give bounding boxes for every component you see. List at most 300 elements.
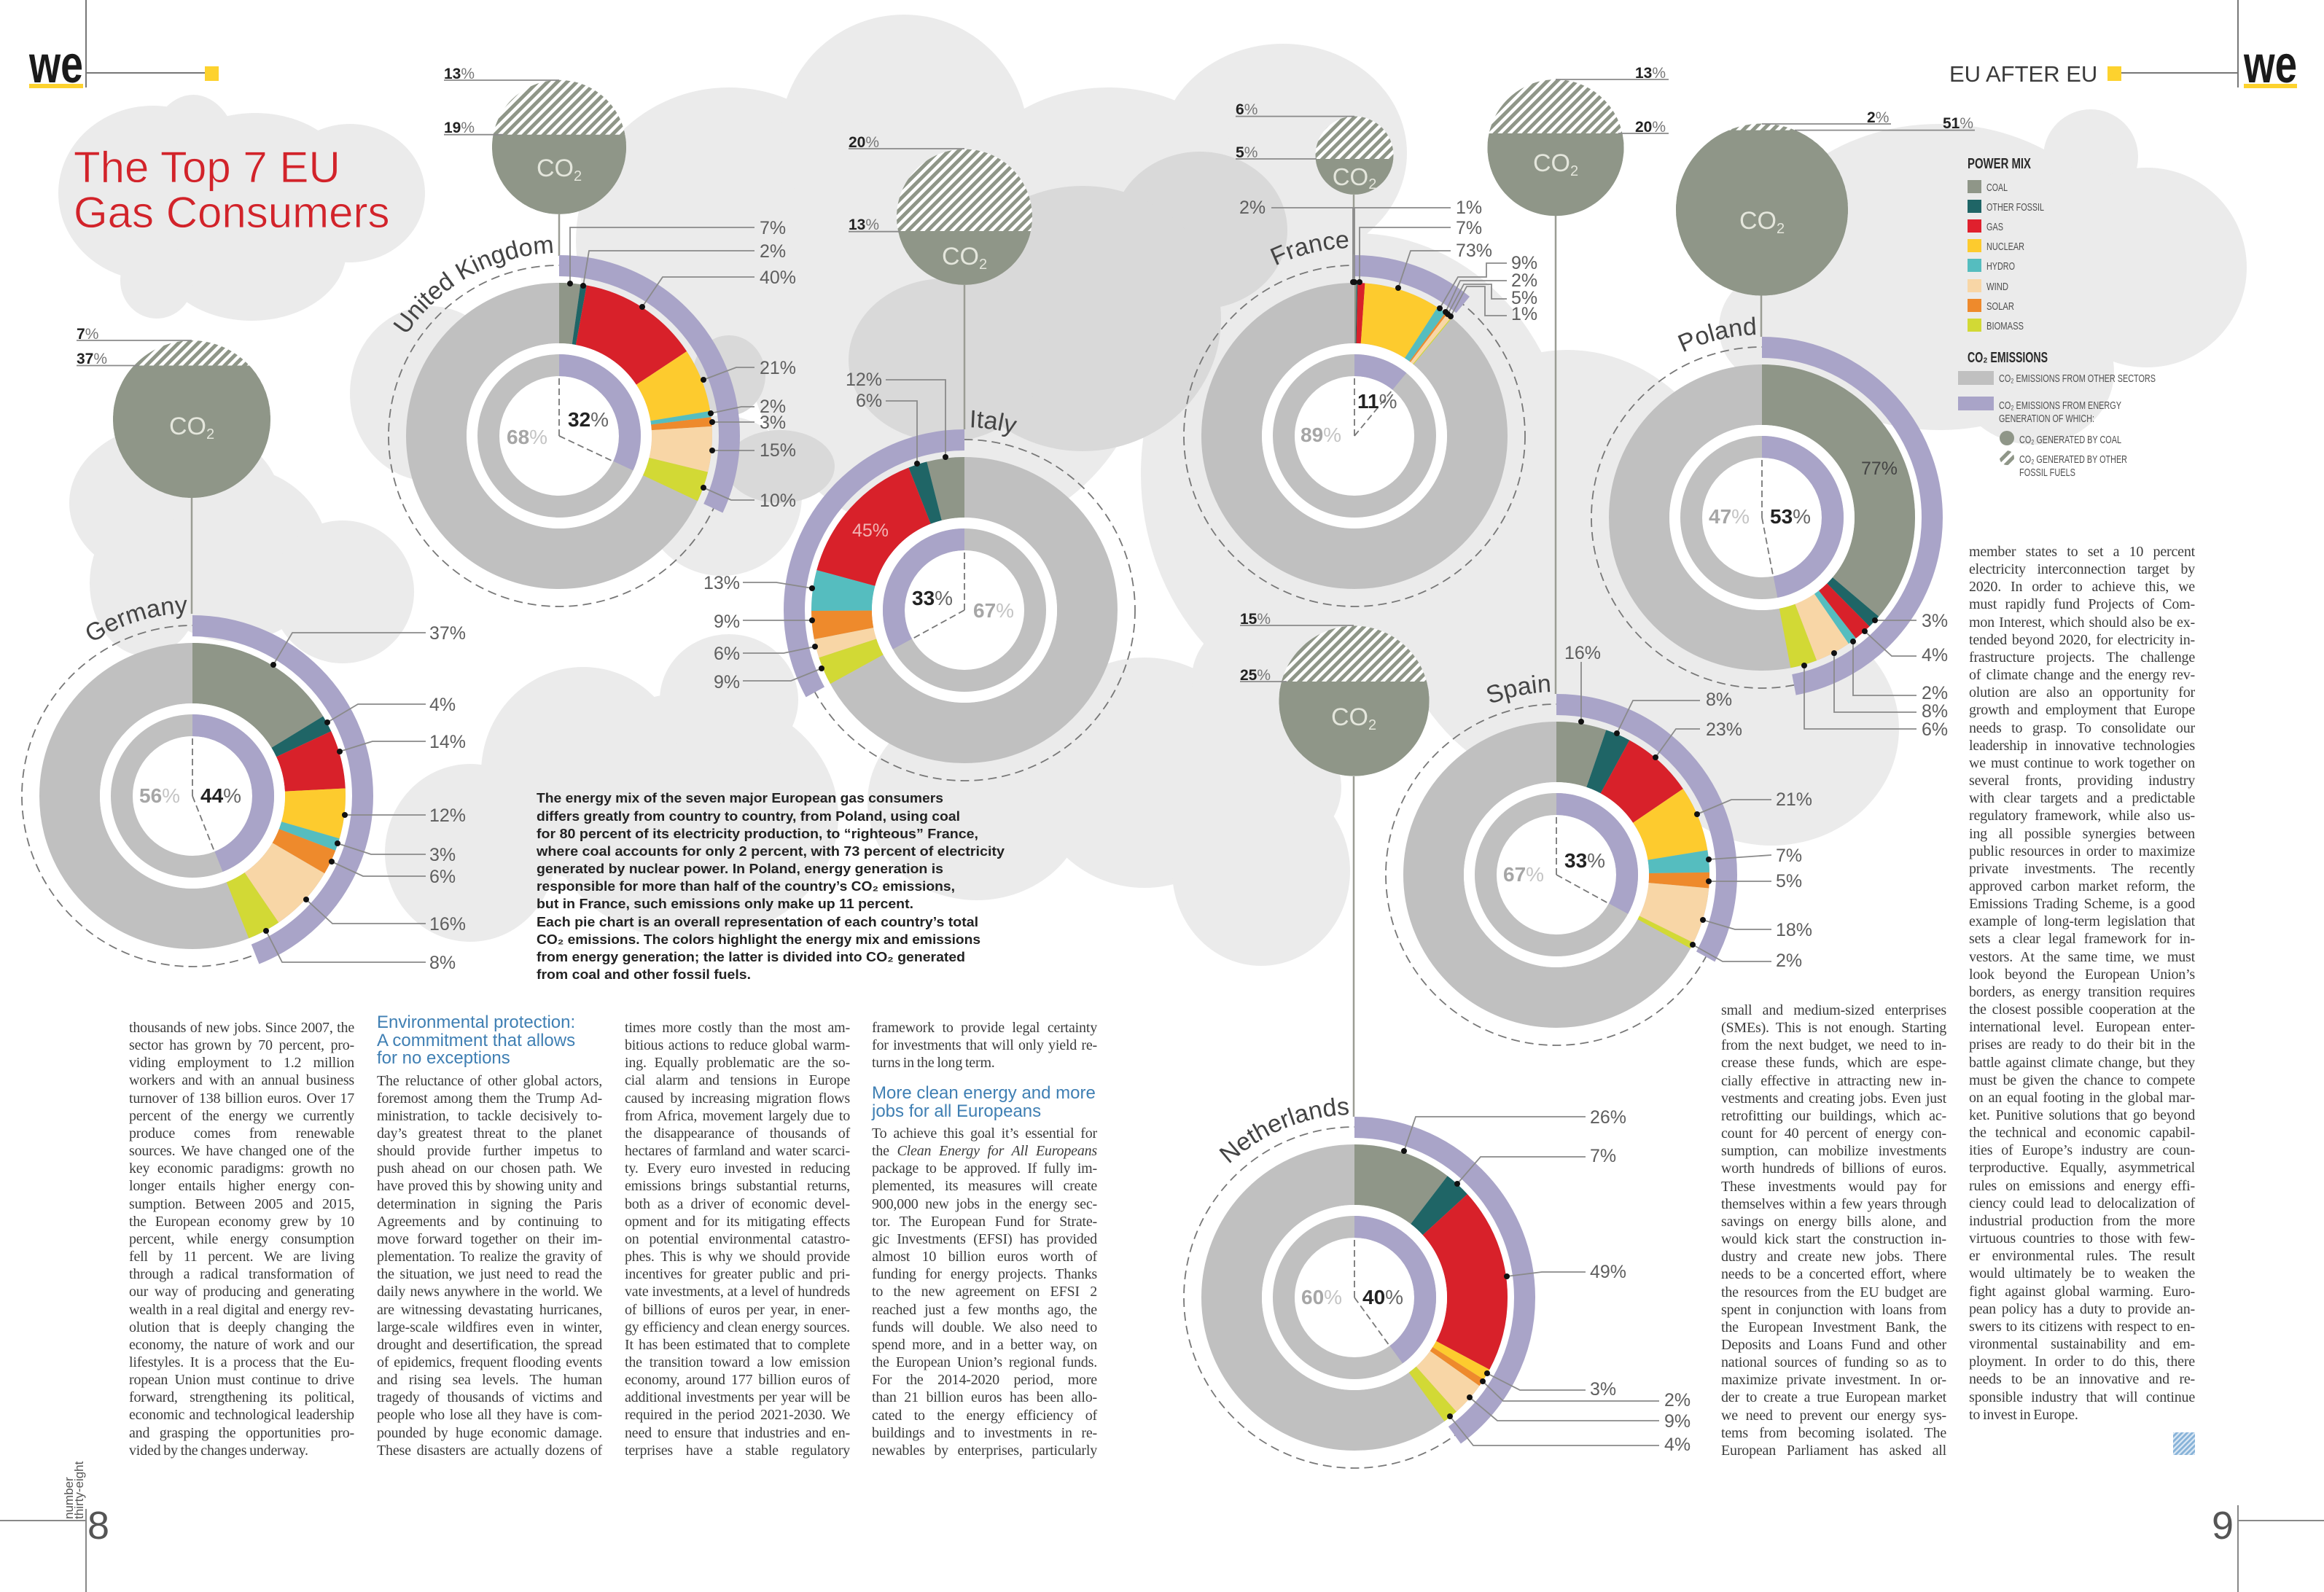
Spain rings: Spain xyxy=(1487,675,1550,703)
body column 4 bottom: funds will double. We also need to xyxy=(872,1319,1097,1335)
body column 6: needs to grasp. To consolidate our xyxy=(1969,720,2195,736)
body column 3: need to ensure that industries and en- xyxy=(625,1425,850,1441)
France power mix labels: 9% xyxy=(1511,253,1537,273)
Germany rings: Germany xyxy=(86,600,187,640)
heading: Environmental protection xyxy=(377,1014,575,1068)
UK CO2 circle xyxy=(444,66,626,256)
body column 3: incentives for greater public and pri- xyxy=(625,1266,850,1282)
Spain power mix labels: 18% xyxy=(1776,920,1812,940)
France power mix labels: 1% xyxy=(1511,304,1537,324)
body column 2: The reluctance of other global actors, xyxy=(377,1073,602,1089)
Germany power mix labels: 12% xyxy=(429,805,466,826)
Poland CO2 circle xyxy=(1676,109,1975,337)
body column 1: and grasping the opportunities pro- xyxy=(129,1425,354,1441)
body column 5: the resources from the EU budget are xyxy=(1721,1284,1946,1300)
body column 4 bottom: the European Union’s regional funds. xyxy=(872,1354,1097,1370)
Poland CO2 circle: 2% xyxy=(1867,109,1889,126)
body column 3: bitious actions to reduce global warm- xyxy=(625,1037,850,1053)
Germany CO2 circle xyxy=(77,326,270,614)
body column 6: industrial production from the more xyxy=(1969,1213,2195,1229)
body column 2: are witnessing devastating hurricanes, xyxy=(377,1302,602,1318)
Germany power mix labels xyxy=(266,623,466,973)
heading: Environmental protection: for no exceptions xyxy=(377,1048,510,1068)
body column 6: mon Interest, which should also be ex- xyxy=(1969,614,2195,631)
body column 3: from Africa, movement largely due to xyxy=(625,1108,850,1124)
heading: Environmental protection: Environmental protection: xyxy=(377,1012,575,1032)
UK power mix labels: 21% xyxy=(760,358,796,378)
Poland CO2 circle: 51% xyxy=(1943,115,1973,132)
body column 1: workers and with an annual business xyxy=(129,1072,354,1088)
body column 6: terproductive. Equally, asymmetrical xyxy=(1969,1160,2195,1176)
body column 4 bottom: gic Investments (EFSI) has provided xyxy=(872,1231,1097,1247)
body column 6: olution are also an opportunity for xyxy=(1969,684,2195,701)
France CO2 circle: 2 xyxy=(1368,176,1376,192)
France power mix labels: 73% xyxy=(1456,241,1492,261)
body column 1 xyxy=(129,1019,354,1459)
body column 5: vestments and creating jobs. Even just xyxy=(1721,1090,1946,1107)
body column 1: forward, strengthening its political, xyxy=(129,1389,354,1405)
UK center percentages xyxy=(507,408,609,448)
Netherlands CO2 circle: 2 xyxy=(1368,717,1376,733)
Italy CO2 circle: 13% xyxy=(849,216,879,233)
intro text block: responsible for more than half of the country’s CO₂ emissions, xyxy=(537,878,955,894)
body column 6: vestors. At the same time, we must xyxy=(1969,949,2195,965)
body column 6: vironmental sustainability and em- xyxy=(1969,1336,2195,1352)
body column 6: fight against global warming. Euro- xyxy=(1969,1284,2195,1300)
Spain CO2 circle: 2 xyxy=(1570,163,1578,179)
UK CO2 circle: 13% xyxy=(444,66,475,82)
legend: CO2 emissions xyxy=(1958,350,2156,479)
body column 6: sets a clear legal framework for in- xyxy=(1969,931,2195,947)
body column 4 bottom: tor. The European Fund for Strate- xyxy=(872,1214,1097,1230)
Italy center percentages: 45% xyxy=(852,520,889,541)
UK power mix labels: 10% xyxy=(760,491,796,511)
header rule left with yellow square xyxy=(86,0,219,87)
body column 3: opment and for its mitigating effects xyxy=(625,1214,850,1230)
Poland rings xyxy=(1591,313,1933,688)
Germany power mix labels: 16% xyxy=(429,914,466,934)
Spain power mix labels: 16% xyxy=(1564,643,1601,663)
UK power mix labels: 40% xyxy=(760,268,796,288)
body column 5 xyxy=(1721,1002,1946,1459)
Italy rings: Italy xyxy=(971,410,1018,437)
Poland center percentages xyxy=(1709,459,1898,528)
body column 3: hectares of farmland and water scarci- xyxy=(625,1143,850,1159)
legend xyxy=(1958,156,2156,479)
body column 4 bottom: almost 10 billion euros worth of xyxy=(872,1249,1097,1265)
Italy power mix labels: 9% xyxy=(714,612,740,632)
Netherlands power mix labels: 2% xyxy=(1664,1390,1691,1410)
body column 1: percent of the energy we currently xyxy=(129,1108,354,1124)
Germany CO2 circle: 2 xyxy=(206,426,214,442)
body column 6: public resources in order to maximize xyxy=(1969,843,2195,859)
body column 2: of epidemics, frequent flooding events xyxy=(377,1354,602,1370)
body column 6: several fronts, providing industry xyxy=(1969,773,2195,789)
body column 4 bottom: to the new agreement on EFSI 2 xyxy=(872,1284,1097,1300)
intro text block: differs greatly from country to country, from Poland, using coal xyxy=(537,808,960,824)
Germany CO2 circle: CO xyxy=(169,413,206,440)
body column 1: through a radical transformation of xyxy=(129,1266,354,1282)
France CO2 circle: CO xyxy=(1333,163,1368,190)
Netherlands power mix labels: 49% xyxy=(1590,1262,1626,1282)
body column 4 bottom: plemented, its measures will create xyxy=(872,1178,1097,1194)
body column 3: vate investments, at a level of hundreds xyxy=(625,1284,850,1300)
body column 2: ministration, to tackle decisively to- xyxy=(377,1108,602,1124)
body column 1: wealth in a real digital and energy rev- xyxy=(129,1302,354,1318)
body column 4 bottom: newables by enterprises, particularly xyxy=(872,1443,1097,1459)
France CO2 circle: 6% xyxy=(1236,101,1257,118)
footer right: rules and page number 9: 9 xyxy=(2212,1504,2234,1548)
intro text block: generated by nuclear power. In Poland, energy generation is xyxy=(537,861,943,876)
body column 2: move forward together on their im- xyxy=(377,1231,602,1247)
UK power mix labels: 2% xyxy=(760,241,786,262)
Germany power mix labels: 3% xyxy=(429,845,456,865)
Italy power mix labels: 13% xyxy=(703,573,740,593)
Germany center percentages: 56% xyxy=(139,784,180,807)
end mark: hatched blue square xyxy=(2173,1432,2195,1455)
France center percentages: 11% xyxy=(1357,390,1397,413)
legend: power mix: SOLAR xyxy=(1986,300,2014,313)
Poland CO2 circle: CO xyxy=(1739,207,1777,235)
body column 3: required in the period 2021-2030. We xyxy=(625,1407,850,1423)
intro text block: CO₂ emissions. The colors highlight the energy mix and emissions xyxy=(537,932,980,947)
chart: Italy xyxy=(703,134,1136,781)
legend: power mix: BIOMASS xyxy=(1986,320,2024,332)
footer right: rules and page number 9 xyxy=(2212,1504,2324,1592)
UK power mix labels: 7% xyxy=(760,218,786,238)
France rings xyxy=(1184,226,1525,606)
body column 4 bottom: cated to the energy efficiency of xyxy=(872,1407,1097,1423)
legend: power mix: WIND xyxy=(1986,281,2008,293)
France power mix labels: 2% xyxy=(1239,198,1266,218)
body column 6: er environmental rules. The result xyxy=(1969,1248,2195,1264)
UK CO2 circle: 2 xyxy=(574,168,582,184)
body column 6: must be given the chance to compete xyxy=(1969,1072,2195,1088)
body column 1: viding employment to 1.2 million xyxy=(129,1055,354,1071)
Netherlands center percentages xyxy=(1301,1286,1403,1308)
body column 6: rules on emissions and energy effi- xyxy=(1969,1178,2195,1194)
body column 6: needs to be an innovative and re- xyxy=(1969,1371,2195,1387)
body column 4 top: for investments that will only yield re- xyxy=(872,1037,1097,1053)
Poland center percentages: 53% xyxy=(1770,505,1811,528)
body column 6: we must continue to work together on xyxy=(1969,755,2195,771)
Germany power mix labels: 14% xyxy=(429,732,466,752)
logo: we left: we xyxy=(28,36,83,94)
legend: power mix: HYDRO xyxy=(1986,260,2015,273)
body column 3: terprises have a stable regulatory xyxy=(625,1443,850,1459)
body column 2: plementation. To realize the gravity of xyxy=(377,1249,602,1265)
body column 6: Emissions Trading Scheme, is a good xyxy=(1969,896,2195,912)
body column 3: emissions brings substantial returns, xyxy=(625,1178,850,1194)
France power mix labels: 2% xyxy=(1511,270,1537,291)
Italy power mix labels: 9% xyxy=(714,672,740,692)
body column 6 xyxy=(1969,543,2195,1424)
Germany power mix labels: 6% xyxy=(429,867,456,887)
body column 1: economy, the nature of work and our xyxy=(129,1337,354,1353)
Netherlands power mix labels xyxy=(1404,1107,1691,1455)
body column 3: ty. Every euro invested in reducing xyxy=(625,1160,850,1177)
UK power mix labels: 2% xyxy=(760,397,786,417)
body column 6: the closest possible cooperation at the xyxy=(1969,1002,2195,1018)
body column 5: savings on energy bills alone, and xyxy=(1721,1214,1946,1230)
Germany power mix labels: 37% xyxy=(429,623,466,644)
Italy CO2 circle: 2 xyxy=(979,257,987,273)
body column 5: These investments would pay for xyxy=(1721,1179,1946,1195)
body column 2: day’s greatest threat to the planet xyxy=(377,1125,602,1142)
chart: Spain xyxy=(1386,65,1812,1045)
Netherlands CO2 circle xyxy=(1240,611,1429,1117)
body column 3: times more costly than the most am- xyxy=(625,1020,850,1036)
heading: More clean energy: More clean energy and more xyxy=(872,1083,1096,1103)
intro text block xyxy=(536,790,1005,982)
body column 1: turnover of 138 billion euros. Over 17 xyxy=(129,1090,354,1107)
Germany CO2 circle: 37% xyxy=(77,351,107,367)
footer left: rules and page number 8 xyxy=(0,1504,109,1592)
legend: power mix: OTHER FOSSIL xyxy=(1986,201,2044,214)
body column 1: thousands of new jobs. Since 2007, the xyxy=(129,1020,354,1036)
intro text block: Each pie chart is an overall representation of each country’s total xyxy=(537,914,978,929)
body column 6: ing all possible synergies between xyxy=(1969,825,2195,841)
France center percentages xyxy=(1301,390,1397,446)
body column 3: caused by increasing migration flows xyxy=(625,1090,850,1107)
body column 3: gy efficiency and clean energy sources. xyxy=(625,1319,850,1335)
Spain power mix labels: 8% xyxy=(1706,690,1732,710)
body column 3: cial alarm and tensions in Europe xyxy=(625,1072,850,1088)
logo: we right: we xyxy=(2243,36,2297,94)
body column 3: It has been estimated that to complete xyxy=(625,1337,850,1353)
body column 3: on potential environmental catastro- xyxy=(625,1231,850,1247)
Poland center percentages: 47% xyxy=(1709,505,1750,528)
body column 1: lifestyles. It is a process that the Eu- xyxy=(129,1354,354,1370)
Netherlands rings: Netherlands xyxy=(1219,1098,1349,1163)
body column 2: foremost among them the Trump Ad- xyxy=(377,1090,602,1107)
Italy center percentages: 67% xyxy=(973,599,1014,622)
intro text block: where coal accounts for only 2 percent, with 73 percent of electricity xyxy=(536,843,1005,859)
Spain rings xyxy=(1386,670,1727,1045)
heading: More clean energy xyxy=(872,1085,1096,1120)
header text: EU AFTER EU: EU AFTER EU xyxy=(1949,61,2097,87)
Spain power mix labels: 2% xyxy=(1776,951,1802,971)
header rule right with yellow square xyxy=(2107,0,2238,87)
footer left: rules and page number 8: 8 xyxy=(87,1504,109,1548)
body column 5: from the next budget, we need to in- xyxy=(1721,1037,1946,1053)
body column 3 xyxy=(625,1019,850,1459)
body column 5: worth hundreds of billions of euros. xyxy=(1721,1160,1946,1177)
body column 6: ciency could lead to delocalization of xyxy=(1969,1195,2195,1211)
body column 6: swers to its citizens with respect to en- xyxy=(1969,1319,2195,1335)
body column 1: our way of producing and generating xyxy=(129,1284,354,1300)
body column 5: we need to prevent our energy sys- xyxy=(1721,1408,1946,1424)
Netherlands power mix labels: 4% xyxy=(1664,1435,1691,1455)
UK power mix labels xyxy=(570,218,796,511)
body column 5: would kick start the construction in- xyxy=(1721,1231,1946,1247)
body column 6: approved carbon market reform, the xyxy=(1969,878,2195,894)
Poland CO2 circle: 2 xyxy=(1777,221,1785,237)
Germany CO2 circle: 7% xyxy=(77,326,98,343)
body column 6: leadership in innovative technologies xyxy=(1969,738,2195,754)
intro text block: but in France, such emissions only make up 11 percent. xyxy=(537,896,913,911)
body column 5: small and medium-sized enterprises xyxy=(1721,1002,1946,1018)
Italy center percentages: 33% xyxy=(912,587,953,609)
UK center percentages: 68% xyxy=(507,426,547,448)
body column 2: pounded by huge economic damage. xyxy=(377,1425,602,1441)
Spain CO2 circle xyxy=(1487,65,1669,694)
footer left: issue label: number xyxy=(62,1477,76,1519)
body column 1: sources. We have changed one of the xyxy=(129,1143,354,1159)
body column 6: to invest in Europe. xyxy=(1969,1407,2078,1423)
legend: power mix: COAL xyxy=(1986,182,2008,194)
Poland power mix labels: 8% xyxy=(1922,701,1948,722)
Poland power mix labels: 2% xyxy=(1922,683,1948,703)
body column 2: These disasters are actually dozens of xyxy=(377,1443,602,1459)
Netherlands CO2 circle: CO xyxy=(1331,703,1368,731)
body column 4 top: framework to provide legal certainty xyxy=(872,1020,1097,1036)
body column 6: private investments. The recently xyxy=(1969,861,2195,877)
body column 6: 2020. In order to achieve this, we xyxy=(1969,579,2195,595)
body column 1: ropean Union must continue to drive xyxy=(129,1372,354,1388)
body column 6: virtuous countries to those with few- xyxy=(1969,1230,2195,1246)
Spain power mix labels: 23% xyxy=(1706,719,1742,740)
body column 6: member states to set a 10 percent xyxy=(1969,544,2195,560)
heading: Environmental protection: A commitment that allows xyxy=(377,1031,575,1050)
body column 5: cially effective in attracting new in- xyxy=(1721,1073,1946,1089)
body column 5: tems from becoming isolated. The xyxy=(1721,1425,1946,1441)
chart: Poland xyxy=(1591,109,1975,740)
body column 5: retrofitting our buildings, which ac- xyxy=(1721,1108,1946,1124)
legend: CO2 emissions: CO₂ EMISSIONS xyxy=(1968,350,2048,366)
Italy CO2 circle: CO xyxy=(942,243,979,270)
body column 5: der to create a true European market xyxy=(1721,1389,1946,1405)
Spain power mix labels: 7% xyxy=(1776,846,1802,866)
body column 4 top xyxy=(872,1019,1097,1072)
Italy power mix labels: 6% xyxy=(856,391,882,411)
France power mix labels xyxy=(1239,198,1537,324)
legend: CO2 emissions: CO₂ EMISSIONS FROM ENERGY xyxy=(1999,399,2121,412)
Germany power mix labels: 8% xyxy=(429,953,456,973)
body column 6: electricity interconnection target by xyxy=(1969,561,2195,577)
body column 5: themselves within a few years through xyxy=(1721,1196,1946,1212)
body column 6: look beyond the European Union’s xyxy=(1969,967,2195,983)
body column 5: maximize private investment. In or- xyxy=(1721,1372,1946,1388)
body column 3: ing. Equally problematic are the so- xyxy=(625,1055,850,1071)
body column 6: with clear targets and a predictable xyxy=(1969,790,2195,806)
body column 6: international level. European enter- xyxy=(1969,1019,2195,1035)
chart: Netherlands xyxy=(1184,611,1691,1468)
body column 4 bottom: package to be approved. If fully im- xyxy=(872,1160,1097,1177)
body column 2: have proved this by showing unity and xyxy=(377,1178,602,1194)
body column 1: longer entails higher energy con- xyxy=(129,1178,354,1194)
body column 3: economy, around 177 billion euros of xyxy=(625,1372,850,1388)
body column 1: sumption. Between 2005 and 2015, xyxy=(129,1196,354,1212)
body column 2: push ahead on our chosen path. We xyxy=(377,1160,602,1177)
body column 4 bottom: the Clean Energy for All Europeans xyxy=(872,1143,1097,1159)
France rings: France xyxy=(1270,235,1349,265)
body column 2: the situation, we just need to read the xyxy=(377,1266,602,1282)
legend: power mix: NUCLEAR xyxy=(1986,241,2024,253)
France CO2 circle: 5% xyxy=(1236,144,1257,161)
body column 3: phes. This is why we should provide xyxy=(625,1249,850,1265)
France center percentages: 89% xyxy=(1301,424,1341,446)
intro text block: from energy generation; the latter is divided into CO₂ generated xyxy=(537,949,965,964)
body column 2: people who lose all they have is com- xyxy=(377,1407,602,1423)
body column 2: tragedy of thousands of victims and xyxy=(377,1389,602,1405)
body column 1: olution that is deeply changing the xyxy=(129,1319,354,1335)
body column 4 bottom: 900,000 new jobs in the energy sec- xyxy=(872,1196,1097,1212)
legend: CO2 emissions: CO₂ EMISSIONS FROM OTHER SECTORS xyxy=(1999,372,2156,385)
France power mix labels: 7% xyxy=(1456,218,1482,238)
body column 4 bottom xyxy=(872,1125,1097,1459)
UK CO2 circle: 19% xyxy=(444,120,475,136)
legend: CO2 emissions: GENERATION OF WHICH: xyxy=(1999,413,2094,425)
Netherlands power mix labels: 26% xyxy=(1590,1107,1626,1128)
Poland power mix labels: 6% xyxy=(1922,719,1948,740)
legend: power mix: POWER MIX xyxy=(1968,156,2031,172)
body column 5: (SMEs). This is not enough. Starting xyxy=(1721,1020,1946,1036)
body column 6: of climate change and the energy rev- xyxy=(1969,667,2195,683)
body column 1: economic and technological leadership xyxy=(129,1407,354,1423)
Germany rings xyxy=(21,600,373,967)
Spain CO2 circle: 13% xyxy=(1635,65,1666,82)
body column 5: European Parliament has asked all xyxy=(1721,1443,1946,1459)
body column 1: vided by the changes underway. xyxy=(129,1443,308,1459)
body column 1: sector has grown by 70 percent, pro- xyxy=(129,1037,354,1053)
footer left: issue label: thirty-eight xyxy=(72,1461,86,1519)
body column 6: pean policy has a duty to provide an- xyxy=(1969,1301,2195,1317)
body column 2: and rising sea levels. The human xyxy=(377,1372,602,1388)
body column 4 bottom: spend more, and in a better way, on xyxy=(872,1337,1097,1353)
body column 6: regulatory framework, while also us- xyxy=(1969,808,2195,824)
body column 6: battle against climate change, but they xyxy=(1969,1055,2195,1071)
Italy center percentages xyxy=(852,520,1014,622)
body column 2: daily news anywhere in the world. We xyxy=(377,1284,602,1300)
Poland power mix labels: 3% xyxy=(1922,611,1948,631)
body column 3: of billions of euros per year, in ener- xyxy=(625,1302,850,1318)
Spain center percentages: 33% xyxy=(1564,849,1605,872)
intro text block: The energy mix of the seven major European gas consumers xyxy=(537,790,943,805)
body column 2 xyxy=(377,1072,602,1459)
Spain power mix labels xyxy=(1564,643,1812,971)
Italy CO2 circle xyxy=(849,134,1032,429)
body column 2: should provide further impetus to xyxy=(377,1143,602,1159)
body column 2: large-scale wildfires even in winter, xyxy=(377,1319,602,1335)
title: Gas Consumers xyxy=(74,188,389,237)
Italy power mix labels xyxy=(703,370,945,692)
intro text block: from coal and other fossil fuels. xyxy=(537,967,751,982)
body column 3: the disappearance of thousands of xyxy=(625,1125,850,1142)
Poland power mix labels xyxy=(1804,611,1948,740)
Netherlands rings xyxy=(1184,1093,1525,1468)
body column 4 bottom: For the 2014-2020 period, more xyxy=(872,1372,1097,1388)
body column 5: needs to be a concerted effort, where xyxy=(1721,1266,1946,1282)
body column 4 bottom: than 21 billion euros has been allo- xyxy=(872,1389,1097,1405)
Germany center percentages xyxy=(139,784,241,807)
UK rings: United Kingdom xyxy=(393,240,553,332)
Netherlands power mix labels: 3% xyxy=(1590,1379,1616,1400)
Poland rings: Poland xyxy=(1678,316,1755,351)
Spain CO2 circle: CO xyxy=(1533,149,1570,177)
Spain center percentages xyxy=(1503,849,1605,886)
body column 1: the European economy grew by 10 xyxy=(129,1214,354,1230)
Spain center percentages: 67% xyxy=(1503,863,1544,886)
intro text block: for 80 percent of its electricity production, to “righteous” France, xyxy=(537,826,978,841)
legend: CO2 emissions: CO₂ GENERATED BY OTHER xyxy=(2019,453,2127,466)
UK center percentages: 32% xyxy=(568,408,609,431)
background clouds: light xyxy=(58,15,2247,966)
body column 6: prises are ready to do their bit in the xyxy=(1969,1037,2195,1053)
Netherlands center percentages: 60% xyxy=(1301,1286,1342,1308)
chart: United Kingdom xyxy=(388,66,825,636)
Italy CO2 circle: 20% xyxy=(849,134,879,151)
